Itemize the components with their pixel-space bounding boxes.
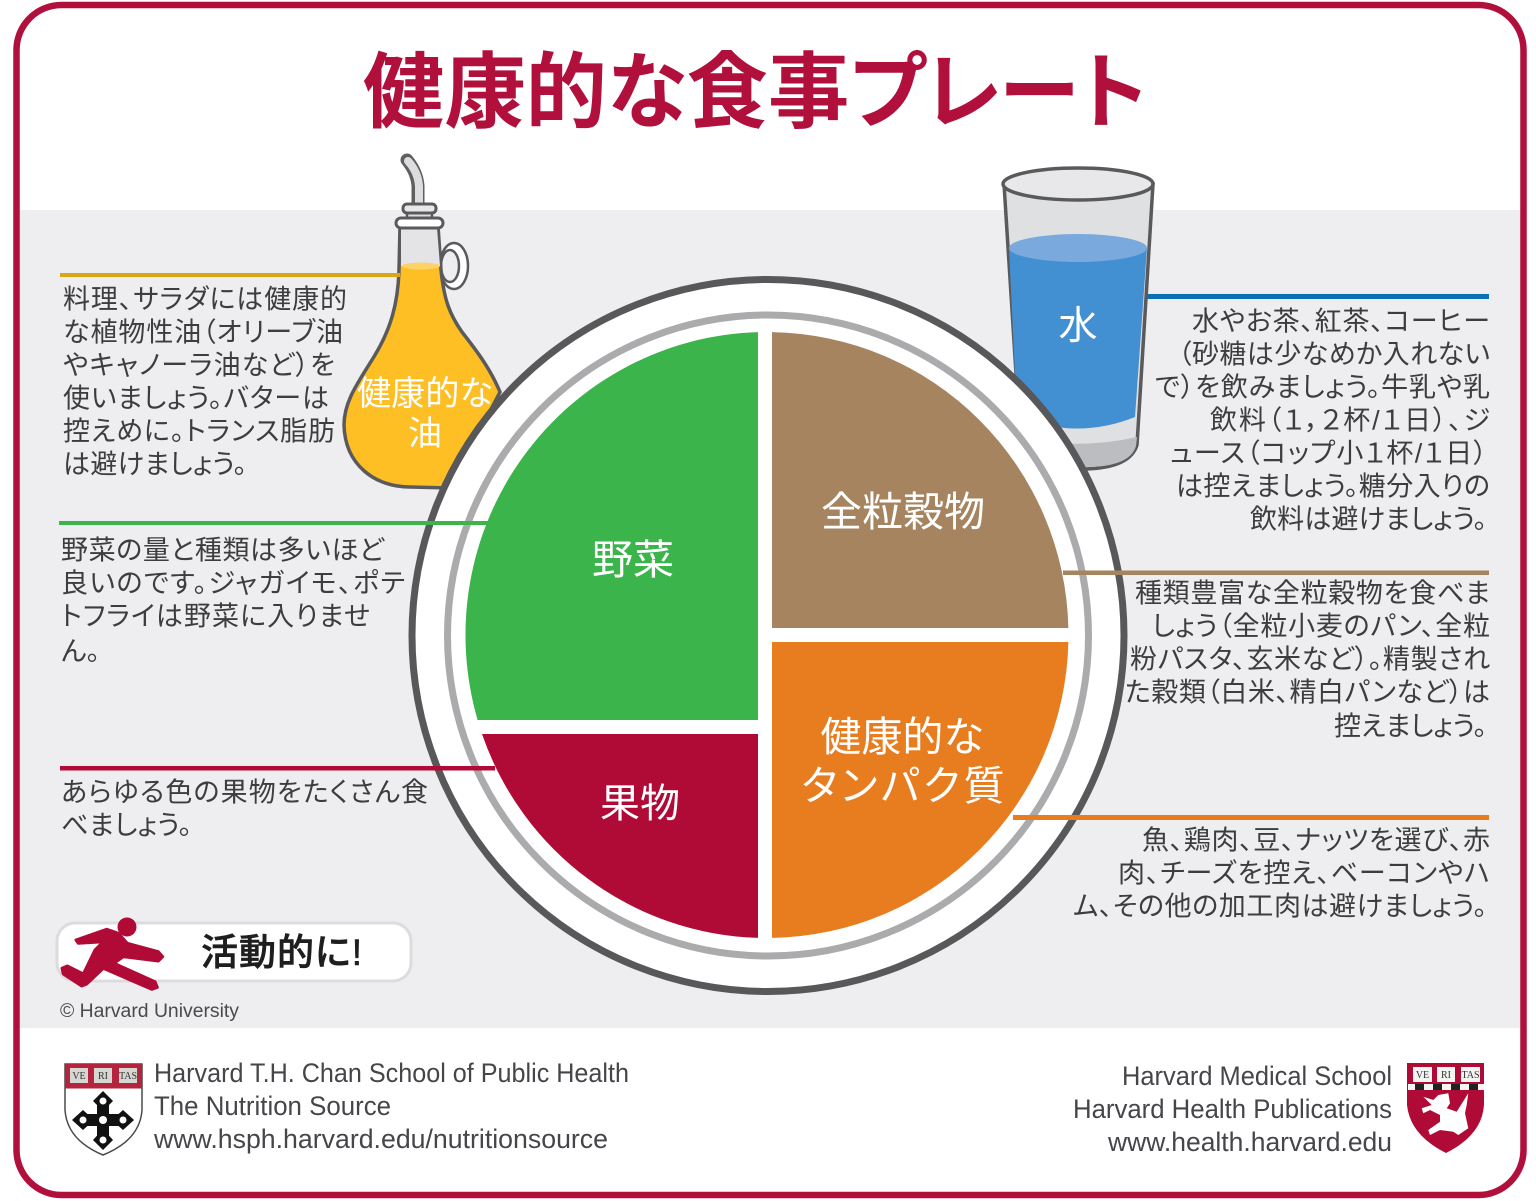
text: water: 水やお茶、紅茶、コーヒー [1192, 306, 1490, 336]
segment: vegetables [465, 332, 758, 720]
shield: Harvard Chan School: RI [98, 1071, 108, 1082]
label: fruits: 果物 [600, 782, 680, 826]
oil label [357, 375, 493, 453]
copyright: © Harvard University [60, 1001, 239, 1022]
label: healthy protein: 健康的な [820, 714, 984, 760]
text: oils: やキャノーラ油など）を [63, 350, 335, 380]
badge text: 活動的に! [201, 932, 362, 973]
text: oils: 使いましょう。バターは [63, 384, 329, 414]
text: water [1155, 306, 1490, 534]
glass rim [1003, 168, 1153, 200]
text: Harvard Medical School: Harvard Medical School [1122, 1061, 1392, 1091]
text: whole grains: 粉パスタ、玄米など）。精製され [1130, 644, 1490, 674]
text: whole grains: た穀類（白米、精白パンなど）は [1125, 678, 1490, 708]
shield: Harvard Chan School [65, 1064, 142, 1155]
bottle caps [396, 204, 443, 228]
text: Harvard Chan School: Harvard T.H. Chan School of Public Health [154, 1058, 629, 1088]
text: vegetables [61, 536, 405, 666]
glass body [1004, 184, 1153, 469]
shield: Harvard Medical School: VE [1416, 1070, 1429, 1081]
text: whole grains: しょう（全粒小麦のパン、全粒 [1152, 612, 1490, 642]
text: whole grains: 控えましょう。 [1334, 712, 1487, 742]
shield: Harvard Medical School: TAS [1461, 1070, 1480, 1081]
text: fruits: あらゆる色の果物をたくさん食 [61, 778, 428, 808]
shield: Harvard Chan School: VE [72, 1071, 86, 1082]
text: water: 飲料（１，２杯/１日）、ジ [1210, 406, 1490, 436]
text: protein [1073, 826, 1490, 922]
text: oils [63, 284, 347, 480]
text: fruits [61, 778, 428, 840]
text: protein: ム、その他の加工肉は避けましょう。 [1073, 892, 1487, 922]
text: vegetables: 野菜の量と種類は多いほど [61, 536, 386, 566]
oil label: 油 [408, 415, 442, 453]
text: fruits: べましょう。 [61, 810, 192, 840]
bottle spout [407, 160, 418, 205]
callout lines [59, 273, 1489, 820]
shield: Harvard Chan School: TAS [119, 1071, 137, 1082]
plate inner ring [448, 315, 1088, 956]
text: Harvard Chan School: The Nutrition Source [154, 1091, 391, 1121]
text: Harvard Medical School: Harvard Health Publications [1073, 1094, 1392, 1124]
text: protein: 肉、チーズを控え、ベーコンやハ [1118, 858, 1490, 888]
text: water: 飲料は避けましょう。 [1250, 504, 1487, 534]
shield: Harvard Medical School: RI [1441, 1070, 1451, 1081]
text: oils: 料理、サラダには健康的 [63, 284, 347, 314]
icon: runner [62, 918, 163, 989]
text: Harvard Medical School [1073, 1061, 1392, 1157]
text: vegetables: トフライは野菜に入りませ [61, 602, 370, 632]
text: vegetables: ん。 [61, 636, 100, 666]
oil label: 健康的な [357, 375, 493, 413]
text: oils: 控えめに。トランス脂肪 [63, 416, 335, 446]
text: whole grains: 種類豊富な全粒穀物を食べま [1135, 578, 1490, 608]
text: vegetables: 良いのです。ジャガイモ、ポテ [61, 568, 405, 598]
text: oils: は避けましょう。 [63, 450, 247, 480]
glass base [1020, 437, 1137, 467]
plate rim [412, 280, 1124, 992]
segment: protein [772, 642, 1068, 938]
water [1009, 248, 1147, 428]
shield: Harvard Medical School [1407, 1063, 1484, 1153]
label: vegetables: 野菜 [592, 537, 674, 583]
text: water: で）を飲みましょう。牛乳や乳 [1155, 372, 1490, 402]
segment: fruits [482, 734, 758, 938]
text: oils: な植物性油（オリーブ油 [63, 318, 343, 348]
badge pill [57, 923, 411, 981]
title: 健康的な食事プレート [363, 46, 1147, 139]
text: water: は控えましょう。糖分入りの [1176, 472, 1490, 502]
label: whole grains: 全粒穀物 [821, 489, 985, 535]
text: water: ュース（コップ小１杯/１日） [1170, 438, 1487, 468]
water label: 水 [1058, 305, 1098, 348]
bottle glass and oil [344, 226, 500, 488]
stay active badge [57, 918, 411, 989]
icon: oil bottle [344, 160, 500, 488]
text: Harvard Medical School: www.health.harvard.edu [1107, 1127, 1392, 1157]
bottle handle [440, 243, 468, 289]
text: whole grains [1125, 578, 1490, 742]
text: protein: 魚、鶏肉、豆、ナッツを選び、赤 [1142, 826, 1490, 856]
segment: whole grains [772, 332, 1068, 628]
icon: water glass [1003, 168, 1153, 469]
label: healthy protein [802, 714, 1004, 809]
text: Harvard Chan School [153, 1058, 629, 1154]
label: healthy protein: タンパク質 [802, 763, 1004, 809]
text: water: （砂糖は少なめか入れない [1178, 340, 1490, 370]
text: Harvard Chan School: www.hsph.harvard.edu/nutritionsource [153, 1124, 608, 1154]
healthy eating plate [412, 280, 1124, 992]
